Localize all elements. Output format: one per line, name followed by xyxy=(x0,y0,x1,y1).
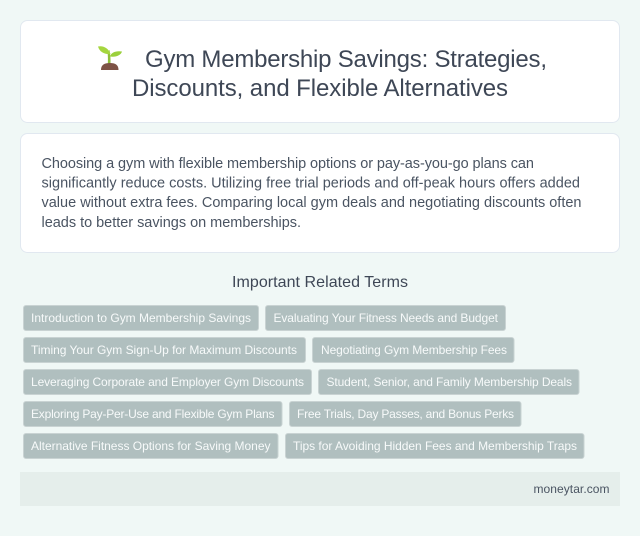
tag xyxy=(290,402,521,426)
tag xyxy=(24,306,258,330)
tag: Leveraging Corporate and Employer Gym Discounts xyxy=(31,375,304,389)
panel: description card xyxy=(20,134,620,252)
tag xyxy=(318,370,579,394)
footer bar xyxy=(20,472,620,506)
text block: description: leads to better savings on memberships. xyxy=(42,215,301,231)
tag xyxy=(286,434,584,458)
heading: Gym Membership Savings: Strategies, xyxy=(145,46,547,73)
heading xyxy=(132,46,547,102)
tag: Evaluating Your Fitness Needs and Budget xyxy=(274,311,499,325)
tag xyxy=(24,402,282,426)
heading: Discounts, and Flexible Alternatives xyxy=(132,75,508,102)
tag: Student, Senior, and Family Membership Deals xyxy=(326,375,572,389)
tag xyxy=(24,370,312,394)
panel: title card xyxy=(20,20,620,122)
icon: seedling xyxy=(98,46,122,70)
tag xyxy=(24,434,278,458)
tag: Alternative Fitness Options for Saving Money xyxy=(31,439,270,453)
tag: Exploring Pay-Per-Use and Flexible Gym Plans xyxy=(31,407,274,421)
tag: Introduction to Gym Membership Savings xyxy=(31,311,251,325)
tag: Tips for Avoiding Hidden Fees and Membership Traps xyxy=(293,439,577,453)
tag xyxy=(24,338,306,362)
tag xyxy=(266,306,506,330)
tag xyxy=(312,338,514,362)
footer text: source: moneytar.com xyxy=(534,482,610,496)
text block: description: significantly reduce costs. Utilizing free trial periods and off-peak hours offers added xyxy=(42,176,580,192)
tag: Free Trials, Day Passes, and Bonus Perks xyxy=(297,407,514,421)
tag: Timing Your Gym Sign-Up for Maximum Discounts xyxy=(31,343,297,357)
text block: description: value without extra fees. Comparing local gym deals and negotiating discounts often xyxy=(42,195,582,211)
heading: important related terms: Important Related Terms xyxy=(232,274,408,291)
tag: Negotiating Gym Membership Fees xyxy=(321,343,507,357)
text block: description xyxy=(42,156,582,231)
tag list xyxy=(24,306,584,458)
text block: description: Choosing a gym with flexible membership options or pay-as-you-go plans can xyxy=(42,156,534,172)
